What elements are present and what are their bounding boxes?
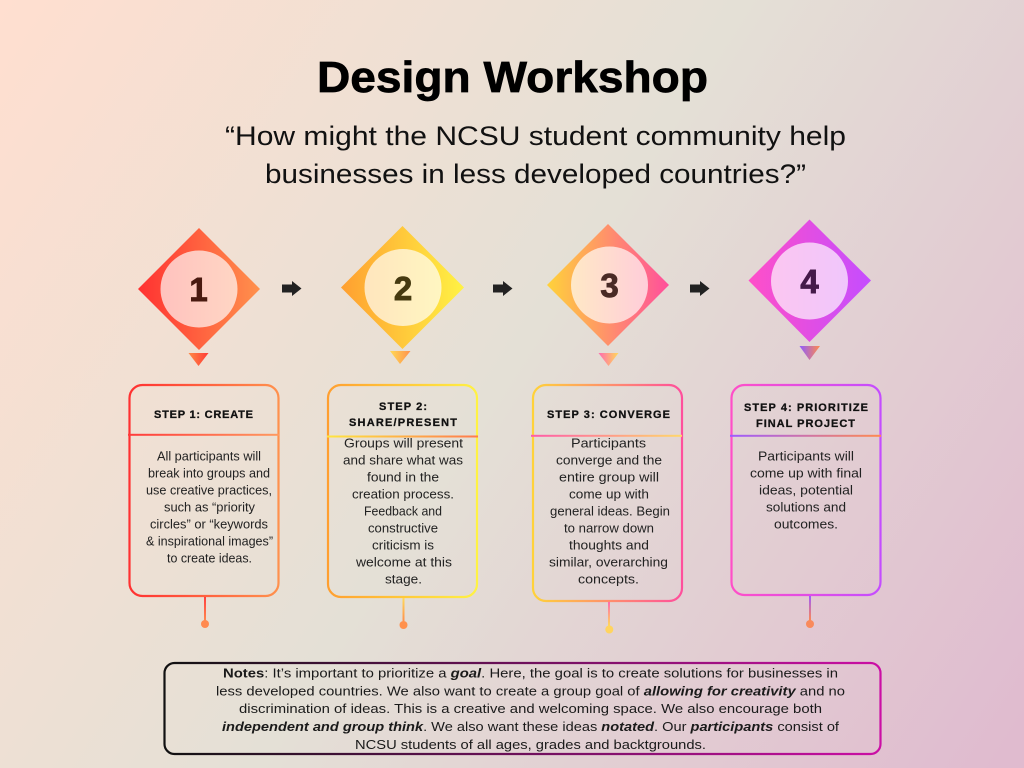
step 3 heading: STEP 3: CONVERGE bbox=[547, 409, 670, 421]
icon: step 2 diamond: 2 bbox=[394, 270, 412, 307]
step 2 description: welcome at this bbox=[355, 556, 452, 570]
panel: step 1 bbox=[128, 385, 279, 596]
notes text: independent and group think . We also want these ideas notated . Our participants consist of bbox=[222, 720, 840, 734]
icon: step 3 diamond bbox=[547, 224, 669, 346]
guiding question bbox=[225, 121, 846, 189]
step 1 description: & inspirational images” bbox=[146, 534, 273, 548]
panel: step 4 bbox=[730, 385, 881, 595]
panel: notes bbox=[164, 663, 880, 754]
arrow: step 1 to step 2 bbox=[282, 281, 302, 296]
step 2 description: constructive bbox=[368, 522, 438, 536]
step 4 description: come up with final bbox=[750, 466, 862, 480]
step 3 description: come up with bbox=[569, 488, 649, 502]
step 1 description: such as “priority bbox=[164, 500, 256, 514]
panel: step 2 bbox=[327, 385, 478, 597]
notes text bbox=[216, 666, 845, 752]
icon: step 2 diamond bbox=[341, 226, 464, 349]
guiding question: businesses in less developed countries?” bbox=[265, 159, 806, 189]
step 3 description: concepts. bbox=[578, 572, 639, 586]
step 3 description: general ideas. Begin bbox=[550, 504, 670, 518]
step 1 description: use creative practices, bbox=[146, 484, 272, 498]
step 2 description: creation process. bbox=[352, 488, 454, 502]
icon: step 3 diamond: 3 bbox=[600, 267, 619, 304]
step 1 description: to create ideas. bbox=[167, 552, 252, 566]
title: Design Workshop bbox=[317, 53, 708, 102]
icon: step 3 pointer bbox=[598, 353, 618, 366]
step 1 description: circles” or “keywords bbox=[150, 518, 268, 532]
connector: step 4 bbox=[806, 596, 814, 628]
arrow: step 3 to step 4 bbox=[690, 281, 710, 296]
icon: step 4 diamond: 4 bbox=[800, 263, 819, 300]
notes text: Notes : It’s important to prioritize a goal . Here, the goal is to create solutions for businesses in bbox=[223, 666, 838, 680]
step 2 description: stage. bbox=[385, 572, 422, 586]
icon: step 4 pointer bbox=[800, 346, 820, 360]
notes text: NCSU students of all ages, grades and backtgrounds. bbox=[355, 738, 706, 752]
panel: step 3 bbox=[531, 385, 682, 601]
step 4 heading bbox=[744, 402, 868, 430]
step 1 description: All participants will bbox=[157, 450, 261, 464]
icon: step 1 diamond: 1 bbox=[189, 271, 208, 308]
step 2 description: Feedback and bbox=[364, 504, 442, 518]
step 1 description bbox=[146, 450, 273, 566]
step 4 description: ideas, potential bbox=[759, 484, 853, 498]
step 2 heading: STEP 2: bbox=[379, 401, 427, 413]
step 4 description: solutions and bbox=[766, 500, 846, 514]
arrow: step 2 to step 3 bbox=[493, 281, 512, 296]
connector: step 3 bbox=[605, 602, 613, 634]
step 1 description: break into groups and bbox=[148, 466, 270, 480]
step 3 description: Participants bbox=[571, 436, 646, 450]
step 3 description: to narrow down bbox=[564, 522, 654, 536]
step 2 description: Groups will present bbox=[344, 436, 464, 450]
connector: step 1 bbox=[201, 597, 209, 628]
step 2 description: criticism is bbox=[372, 538, 434, 552]
icon: step 1 diamond bbox=[138, 228, 260, 350]
step 2 description: found in the bbox=[367, 470, 439, 484]
step 4 description: Participants will bbox=[758, 450, 854, 464]
step 3 description: similar, overarching bbox=[549, 556, 668, 570]
icon: step 1 pointer bbox=[188, 353, 208, 366]
step 2 heading bbox=[349, 401, 457, 429]
guiding question: “How might the NCSU student community help bbox=[225, 121, 846, 151]
notes text: discrimination of ideas. This is a creative and welcoming space. We also encourage both bbox=[239, 702, 822, 716]
step 3 description: thoughts and bbox=[569, 538, 649, 552]
step 4 heading: STEP 4: PRIORITIZE bbox=[744, 402, 868, 414]
step 1 heading: STEP 1: CREATE bbox=[154, 409, 253, 421]
connector: step 2 bbox=[400, 598, 408, 629]
step 2 description bbox=[343, 436, 464, 586]
step 4 description: outcomes. bbox=[774, 518, 838, 532]
icon: step 2 pointer bbox=[390, 351, 410, 364]
step 4 heading: FINAL PROJECT bbox=[756, 418, 855, 430]
icon: step 4 diamond bbox=[748, 220, 871, 342]
step 2 heading: SHARE/PRESENT bbox=[349, 417, 457, 429]
notes text: less developed countries. We also want to create a group goal of allowing for creativity and no bbox=[216, 684, 845, 698]
step 2 description: and share what was bbox=[343, 454, 463, 468]
step 3 description bbox=[549, 436, 670, 586]
step 4 description bbox=[750, 450, 862, 532]
step 3 description: converge and the bbox=[556, 454, 662, 468]
step 3 description: entire group will bbox=[559, 470, 659, 484]
